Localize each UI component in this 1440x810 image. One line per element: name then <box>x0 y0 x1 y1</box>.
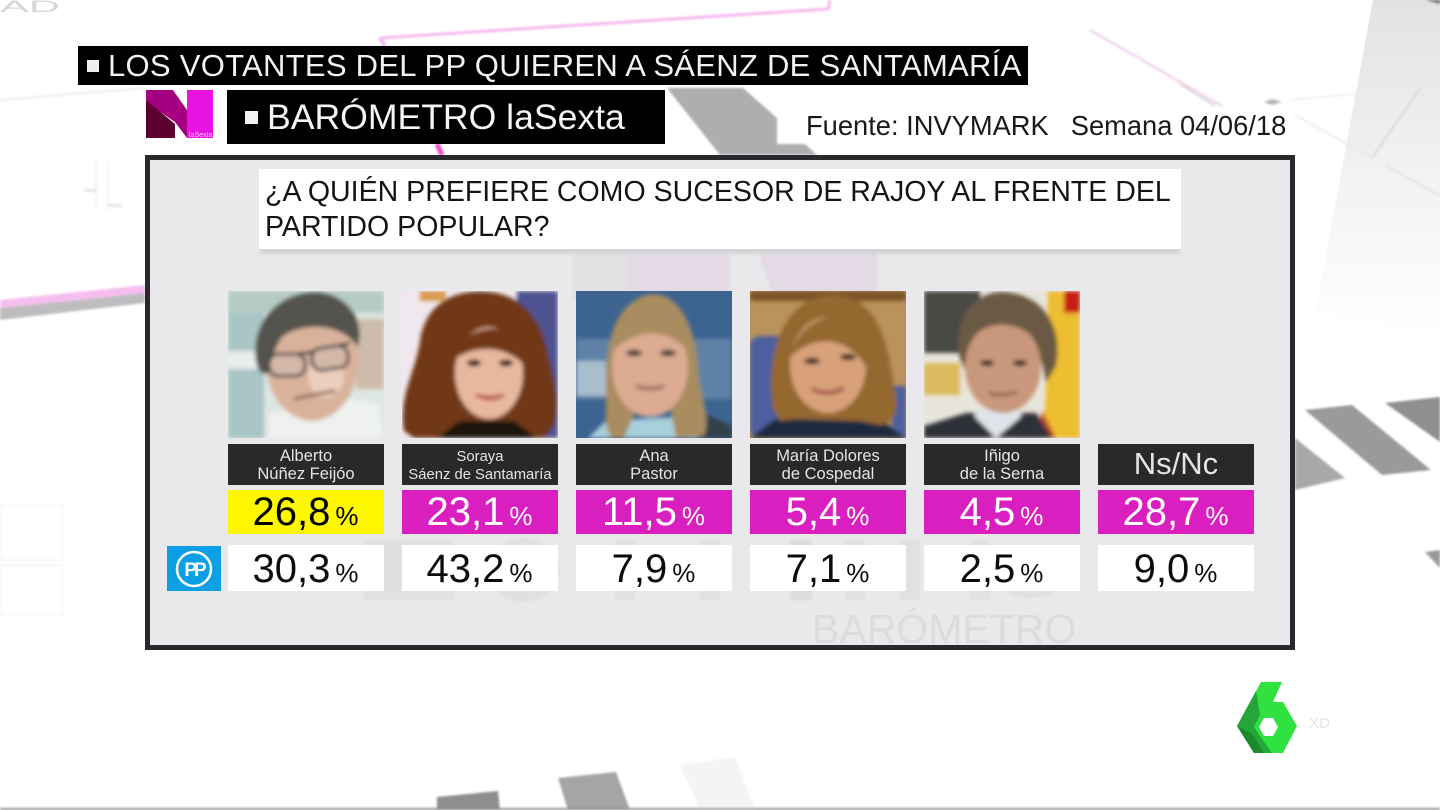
value: Pastor PP voters: 7,9% <box>612 547 695 591</box>
portrait: Íñigo de la Serna <box>924 291 1080 438</box>
label: Íñigo de la Serna: Iñigo <box>984 447 1020 465</box>
label: Soraya Sáenz de Santamaría: Sáenz de Santamaría <box>408 467 552 483</box>
value: Cospedal PP voters: 7,1% <box>786 547 869 591</box>
portrait: Soraya Sáenz de Santamaría <box>402 291 558 438</box>
value: Feijóo PP voters: 30,3% <box>252 547 358 591</box>
label: María Dolores de Cospedal <box>750 444 906 485</box>
value: Ns/Nc total: 28,7% <box>1122 490 1228 534</box>
label: María Dolores de Cospedal: de Cospedal <box>782 465 874 483</box>
label: Ns/Nc: Ns/Nc <box>1134 446 1218 481</box>
value: Ns/Nc PP voters <box>1098 545 1254 591</box>
value: Feijóo total: 26,8% <box>252 490 358 534</box>
portrait: María Dolores de Cospedal <box>750 291 906 438</box>
source and date: Fuente: INVYMARK Semana 04/06/18 <box>806 110 1286 141</box>
subtitle bar <box>227 90 665 144</box>
value: Feijóo PP voters <box>228 545 384 591</box>
label: Íñigo de la Serna <box>924 444 1080 485</box>
title bar: LOS VOTANTES DEL PP QUIEREN A SÁENZ DE SANTAMARÍA <box>108 48 1022 83</box>
label: Ns/Nc <box>1098 444 1254 485</box>
logo: laSexta 6: XD <box>1309 715 1330 732</box>
label: Alberto Núñez Feijóo: Núñez Feijóo <box>257 465 355 483</box>
value: Santamaría total: 23,1% <box>426 490 532 534</box>
subtitle bar: BARÓMETRO laSexta <box>267 97 625 137</box>
value: de la Serna PP voters: 2,5% <box>960 547 1043 591</box>
value: Santamaría PP voters: 43,2% <box>426 547 532 591</box>
label: Ana Pastor: Pastor <box>630 465 678 483</box>
question: ¿A QUIÉN PREFIERE COMO SUCESOR DE RAJOY AL FRENTE DEL <box>265 176 1171 208</box>
logo: N laSexta Noticias <box>146 90 213 139</box>
value: Santamaría total <box>402 490 558 534</box>
logo: laSexta 6 <box>1237 682 1330 753</box>
value: Pastor total: 11,5% <box>602 490 705 534</box>
value: de la Serna total <box>924 490 1080 534</box>
label: Alberto Núñez Feijóo: Alberto <box>280 447 332 465</box>
value: Pastor total <box>576 490 732 534</box>
value: Cospedal total <box>750 490 906 534</box>
value: de la Serna total: 4,5% <box>960 490 1043 534</box>
label: María Dolores de Cospedal: María Dolores <box>776 447 880 465</box>
label: Soraya Sáenz de Santamaría: Soraya <box>457 449 503 465</box>
value: Pastor PP voters <box>576 545 732 591</box>
watermark: large logo shapes <box>260 249 1180 600</box>
value: Cospedal total: 5,4% <box>786 490 869 534</box>
label: Íñigo de la Serna: de la Serna <box>960 465 1044 483</box>
label: Ana Pastor: Ana <box>639 447 669 465</box>
label: Soraya Sáenz de Santamaría <box>402 444 558 485</box>
icon: PP logo: PP <box>184 560 207 581</box>
question: PARTIDO POPULAR? <box>265 211 550 243</box>
icon: PP logo <box>167 546 221 591</box>
value: de la Serna PP voters <box>924 545 1080 591</box>
value: Ns/Nc total <box>1098 490 1254 534</box>
value: Feijóo total <box>228 490 384 534</box>
value: Santamaría PP voters <box>402 545 558 591</box>
portrait: Alberto Núñez Feijóo <box>228 291 384 438</box>
logo: N laSexta Noticias: laSexta <box>189 132 212 139</box>
question <box>259 169 1181 249</box>
label: Ana Pastor <box>576 444 732 485</box>
value: Ns/Nc PP voters: 9,0% <box>1134 547 1217 591</box>
panel: results <box>145 155 1295 650</box>
portrait: Ana Pastor <box>576 291 732 438</box>
label: Alberto Núñez Feijóo <box>228 444 384 485</box>
value: Cospedal PP voters <box>750 545 906 591</box>
